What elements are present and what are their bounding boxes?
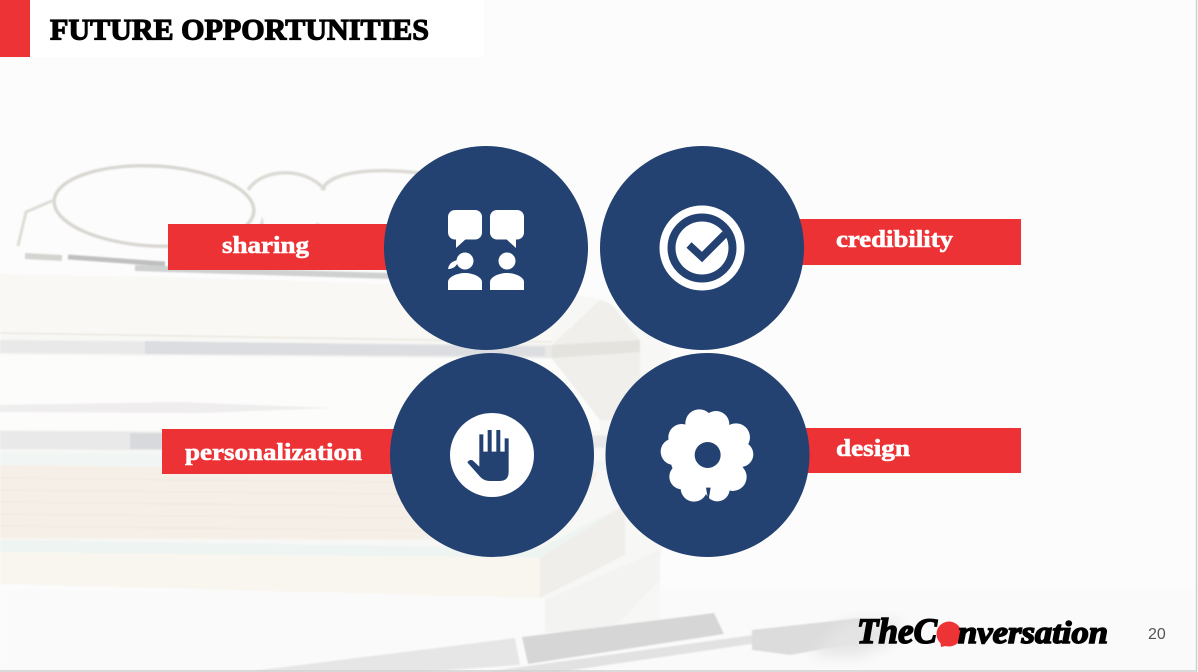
red label bar: design xyxy=(803,428,1021,473)
pens xyxy=(245,613,900,672)
red label bar: sharing xyxy=(168,224,392,270)
red title marker xyxy=(0,0,30,57)
label: personalization: personalization xyxy=(185,440,362,466)
logo: The Conversation xyxy=(857,611,1108,651)
panel: personalization xyxy=(162,353,594,557)
title bar xyxy=(0,0,484,57)
logo speech bubble xyxy=(936,622,962,647)
page number: 20 xyxy=(1148,626,1166,643)
navy circle: design xyxy=(606,353,810,557)
glasses xyxy=(18,161,440,276)
logo: The Conversation: nversation xyxy=(958,614,1108,650)
navy circle: credibility xyxy=(600,146,804,350)
icon: flower xyxy=(661,409,753,502)
navy circle: sharing xyxy=(384,146,588,350)
icon: check mark badge xyxy=(664,210,740,286)
panel: credibility xyxy=(600,146,1021,350)
navy circle: personalization xyxy=(390,353,594,557)
icon: two people talking xyxy=(448,210,524,290)
book stack xyxy=(0,274,670,632)
logo: The Conversation: TheC xyxy=(857,611,938,651)
title: FUTURE OPPORTUNITIES xyxy=(50,14,429,46)
label: design: design xyxy=(836,436,910,462)
label: sharing: sharing xyxy=(222,233,309,259)
icon: raised hand xyxy=(450,413,534,497)
red label bar: personalization xyxy=(162,429,395,474)
label: credibility: credibility xyxy=(836,227,953,253)
red label bar: credibility xyxy=(798,219,1021,265)
panel: design xyxy=(606,353,1021,557)
panel: sharing xyxy=(168,146,588,350)
